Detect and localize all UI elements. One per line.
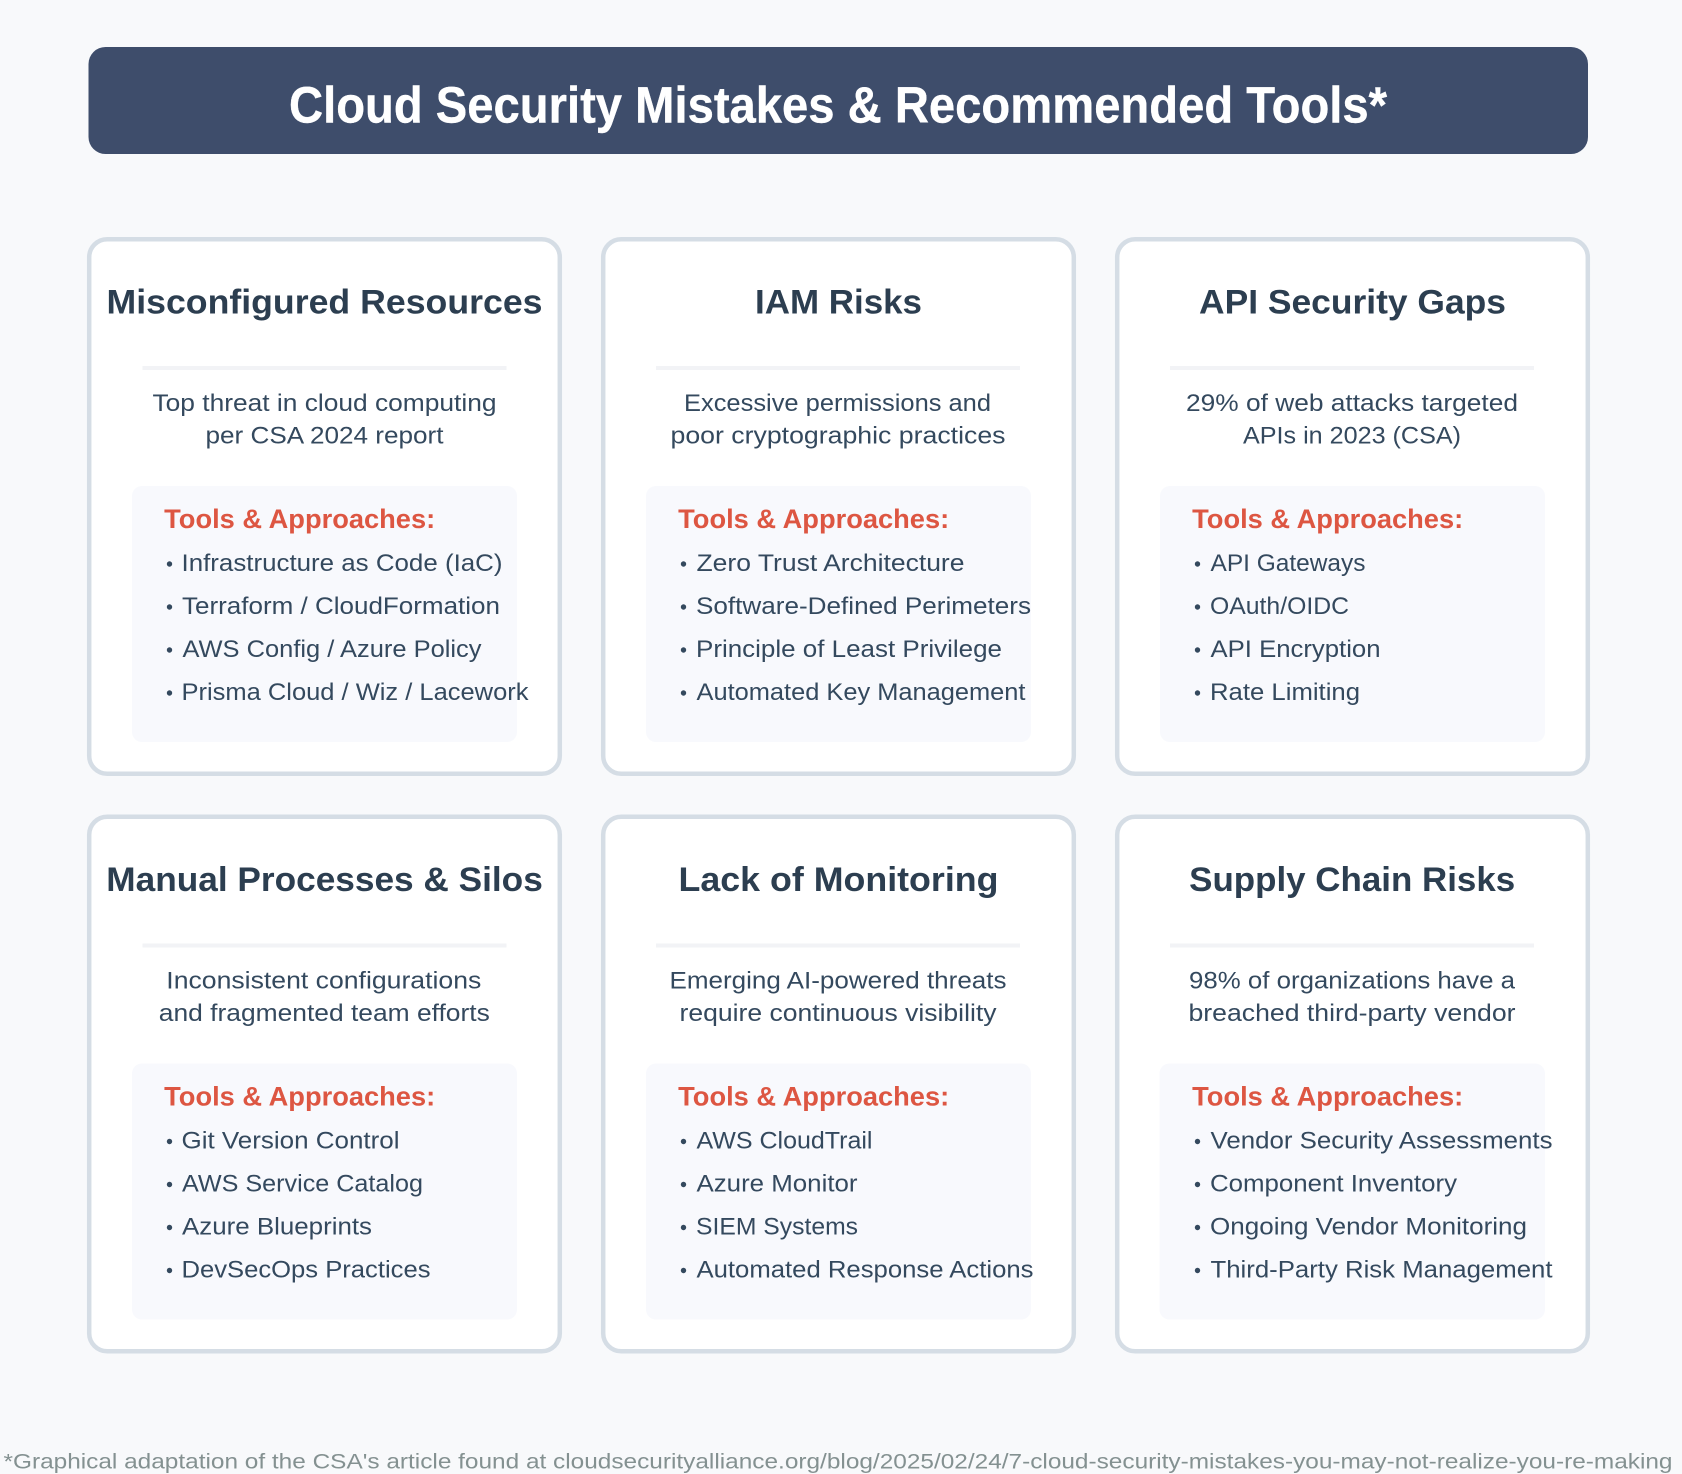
tools list: DevSecOps Practices <box>182 1256 430 1284</box>
description <box>159 968 490 1027</box>
description <box>152 390 496 449</box>
tools list: AWS Config / Azure Policy <box>182 636 482 663</box>
description: require continuous visibility <box>680 1000 996 1027</box>
panel: Supply Chain Risks <box>1117 817 1588 1351</box>
panel: API Security Gaps <box>1117 239 1588 774</box>
tools box <box>646 1064 1034 1320</box>
description <box>1188 968 1516 1027</box>
panel: Manual Processes & Silos <box>89 817 560 1351</box>
tools list: Software-Defined Perimeters <box>696 593 1031 620</box>
tools list <box>167 1128 431 1284</box>
tools list: Automated Key Management <box>696 679 1026 706</box>
tools box <box>1160 1064 1553 1320</box>
tools list <box>167 550 530 706</box>
tools list: Zero Trust Architecture <box>696 550 964 577</box>
panel: IAM Risks <box>603 239 1074 774</box>
tools heading: Tools & Approaches: <box>1192 504 1463 534</box>
description: APIs in 2023 (CSA) <box>1243 422 1461 449</box>
description <box>670 390 1006 449</box>
tools list: API Encryption <box>1210 636 1380 663</box>
description: Inconsistent configurations <box>166 968 481 994</box>
tools heading: Tools & Approaches: <box>164 1082 435 1112</box>
description: Emerging AI-powered threats <box>670 968 1006 994</box>
heading: Manual Processes & Silos <box>106 861 543 899</box>
tools list <box>1195 1128 1553 1284</box>
title: Cloud Security Mistakes & Recommended Tools* <box>289 76 1387 133</box>
tools list: Prisma Cloud / Wiz / Lacework <box>182 679 530 706</box>
description: Excessive permissions and <box>684 390 991 417</box>
description <box>670 968 1006 1027</box>
tools list: Component Inventory <box>1210 1170 1457 1198</box>
heading: IAM Risks <box>755 284 922 322</box>
tools box <box>1160 486 1545 742</box>
tools list: API Gateways <box>1210 550 1366 577</box>
description: 29% of web attacks targeted <box>1186 390 1518 417</box>
tools list: Azure Monitor <box>696 1170 858 1198</box>
tools list: Third-Party Risk Management <box>1210 1256 1553 1284</box>
tools list: Git Version Control <box>182 1128 400 1154</box>
description: Top threat in cloud computing <box>152 390 496 417</box>
description <box>1186 390 1518 449</box>
tools heading: Tools & Approaches: <box>678 504 949 534</box>
tools box <box>646 486 1031 742</box>
heading: API Security Gaps <box>1199 284 1506 322</box>
description: poor cryptographic practices <box>670 422 1006 449</box>
panel: Misconfigured Resources <box>89 239 560 774</box>
tools list: OAuth/OIDC <box>1210 593 1349 620</box>
tools list <box>1195 550 1380 706</box>
description: and fragmented team efforts <box>159 1000 490 1027</box>
tools heading: Tools & Approaches: <box>678 1082 949 1112</box>
tools list: Infrastructure as Code (IaC) <box>182 550 502 577</box>
tools heading: Tools & Approaches: <box>164 504 435 534</box>
heading: Lack of Monitoring <box>678 861 998 899</box>
header banner <box>88 47 1588 154</box>
tools heading: Tools & Approaches: <box>1192 1082 1463 1112</box>
tools box <box>132 1064 517 1320</box>
tools list: Principle of Least Privilege <box>696 636 1002 663</box>
tools list: AWS CloudTrail <box>696 1128 872 1154</box>
tools list <box>681 1128 1034 1284</box>
footer source note: *Graphical adaptation of the CSA's article found at cloudsecurityalliance.org/blog/2025/02/24/7-cloud-security-mistakes-you-may-not-realize-you-re-making <box>4 1450 1672 1474</box>
tools list: AWS Service Catalog <box>182 1170 423 1198</box>
tools list <box>681 550 1031 706</box>
description: breached third-party vendor <box>1188 1000 1516 1027</box>
description: 98% of organizations have a <box>1189 968 1516 994</box>
tools list: Automated Response Actions <box>696 1256 1034 1284</box>
tools list: Ongoing Vendor Monitoring <box>1210 1214 1527 1240</box>
tools list: Terraform / CloudFormation <box>182 593 500 620</box>
tools box <box>132 486 530 742</box>
tools list: Rate Limiting <box>1210 679 1360 706</box>
heading: Misconfigured Resources <box>106 284 542 322</box>
tools list: Vendor Security Assessments <box>1210 1128 1552 1154</box>
description: per CSA 2024 report <box>206 422 444 449</box>
heading: Supply Chain Risks <box>1189 861 1515 899</box>
panel: Lack of Monitoring <box>603 817 1074 1351</box>
tools list: Azure Blueprints <box>182 1214 372 1240</box>
tools list: SIEM Systems <box>696 1214 858 1240</box>
